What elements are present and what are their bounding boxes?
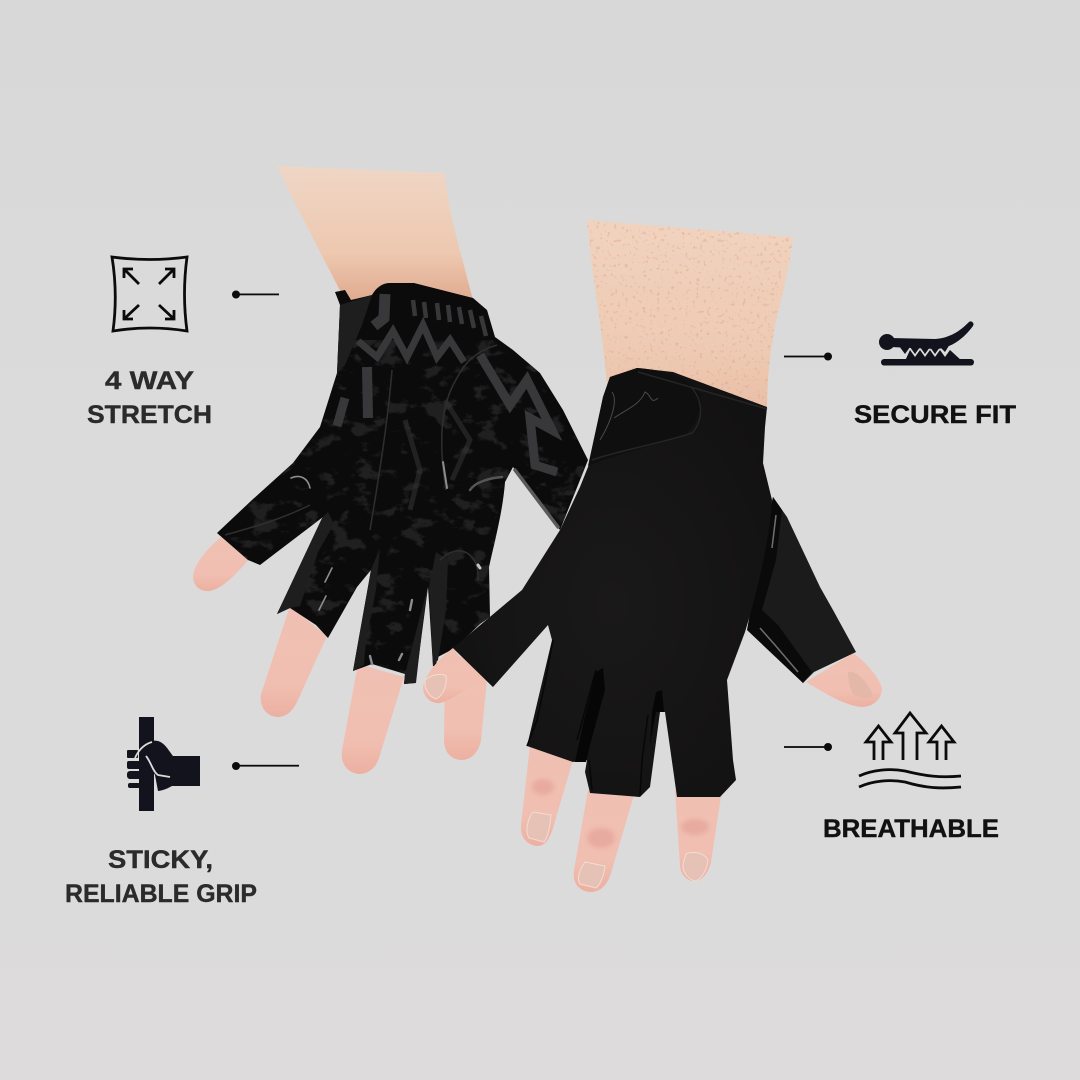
finger seams: [527, 640, 648, 795]
strap stitching: [592, 372, 767, 460]
near thumb cuff: [453, 635, 493, 687]
label: sticky reliable grip: [65, 846, 257, 908]
marble texture on glove: [231, 340, 584, 676]
label: 4 way stretch: 4 WAY: [105, 367, 194, 395]
feature: breathable: [784, 713, 999, 843]
near thumb over left hand: [423, 648, 478, 703]
thumb nail near side: [425, 674, 446, 699]
icon: hook and loop: [879, 321, 974, 366]
thumb nail far side: [848, 672, 873, 698]
leader line: grip: [232, 762, 299, 770]
knuckle creases: [532, 779, 709, 848]
label: breathable: BREATHABLE: [823, 815, 999, 843]
label: secure fit: SECURE FIT: [854, 401, 1016, 429]
icon: air rising over waves: [859, 713, 961, 788]
feature: 4 way stretch: [87, 257, 279, 429]
finger gaps: [575, 668, 664, 762]
leader line: breathable: [784, 743, 832, 751]
right forearm: [587, 220, 793, 410]
freckles: [585, 218, 795, 413]
zigzag print on glove: [337, 294, 557, 510]
label: 4 way stretch: [87, 367, 212, 429]
gloss lines on far-side glove: [760, 515, 798, 672]
fabric panels between fingers: [277, 295, 448, 684]
left hand: shiny grip side of glove: [193, 166, 610, 774]
leader line: stretch: [232, 290, 279, 298]
wrist strap: [588, 368, 701, 466]
label: sticky reliable grip: STICKY,: [108, 846, 213, 874]
feature: sticky reliable grip: [65, 717, 299, 908]
finger nails: [527, 812, 708, 888]
far-side thumb of right hand: [806, 653, 882, 707]
gloss highlights: [291, 462, 558, 664]
right hand: smooth back of glove: [423, 218, 882, 892]
seams on glove: [225, 345, 497, 580]
leader line: secure fit: [784, 352, 832, 360]
icon: stretch square: [112, 257, 187, 331]
label: sticky reliable grip: RELIABLE GRIP: [65, 880, 257, 908]
left glove body: [217, 283, 588, 684]
label: 4 way stretch: STRETCH: [87, 401, 212, 429]
right hand fingers: [521, 745, 722, 892]
left forearm: [277, 166, 473, 300]
far-side glove thumb: [748, 497, 856, 683]
signature on strap: [600, 392, 658, 440]
glossy strip on far-side glove: [747, 497, 812, 683]
right glove body: [453, 368, 772, 797]
left hand fingers: [193, 536, 489, 774]
feature: secure fit: [784, 321, 1016, 429]
icon: hand gripping bar: [127, 717, 200, 811]
